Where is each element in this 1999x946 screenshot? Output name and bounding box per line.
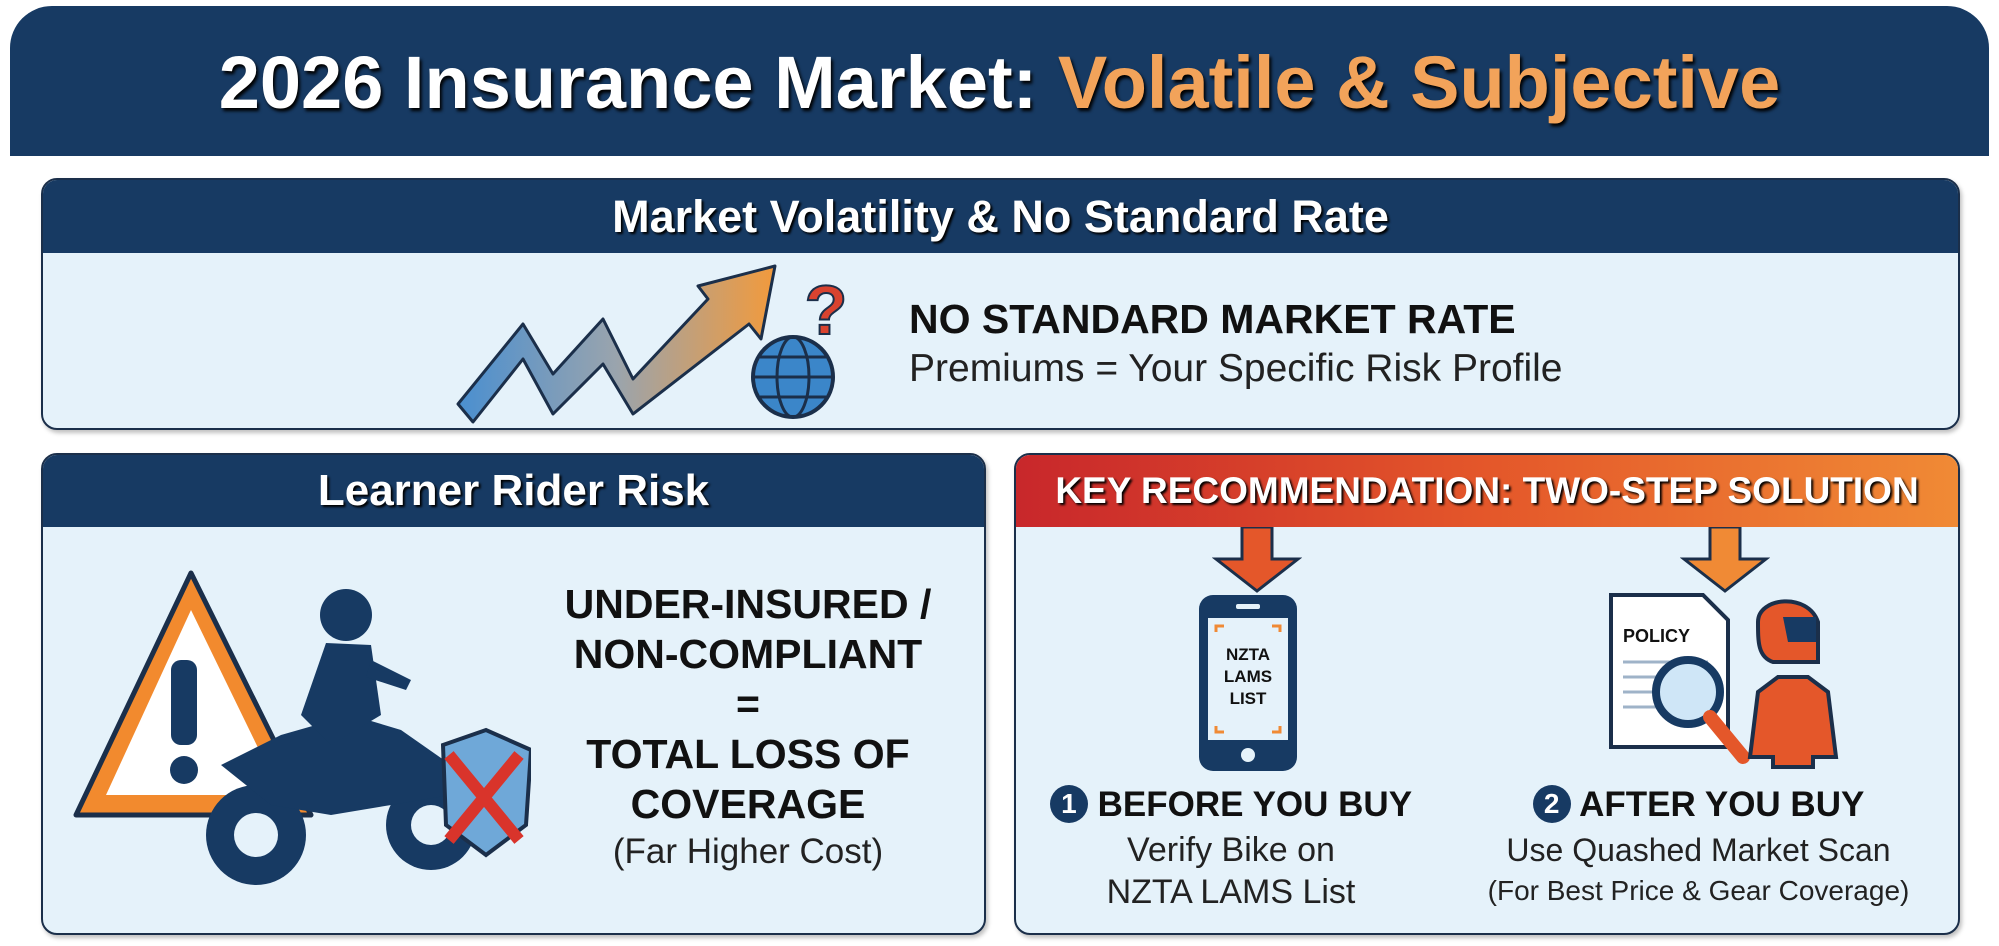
icon: warning triangle with motorbike and shield	[74, 570, 531, 885]
text: under-insured consequence: COVERAGE	[631, 781, 865, 827]
step 1 text: Verify Bike on	[1127, 831, 1335, 869]
title banner	[10, 6, 1989, 156]
panel heading: Market Volatility & No Standard Rate	[612, 191, 1389, 242]
text: no standard market rate	[909, 296, 1562, 390]
step 2 text: 2	[1544, 788, 1559, 819]
step 2 text: (For Best Price & Gear Coverage)	[1488, 875, 1909, 906]
step 1 text: BEFORE YOU BUY	[1098, 785, 1412, 824]
icon: policy, magnifier, helmet and jacket	[1609, 593, 1838, 769]
panel: key recommendation	[1014, 453, 1960, 935]
icon: phone with LAMS list: NZTA	[1226, 645, 1270, 664]
text: under-insured consequence	[565, 581, 931, 871]
step 2 text: Use Quashed Market Scan	[1506, 832, 1891, 868]
step 1 text	[1050, 785, 1412, 911]
icon: phone with LAMS list	[1199, 595, 1297, 771]
icon: globe with question mark: ?	[805, 272, 847, 349]
panel heading: Learner Rider Risk	[318, 466, 709, 515]
text: no standard market rate: NO STANDARD MARKET RATE	[909, 296, 1516, 342]
text: under-insured consequence: (Far Higher Cost)	[613, 832, 883, 871]
panel heading	[1016, 455, 1958, 527]
panel: learner rider risk	[41, 453, 986, 935]
panel: market volatility	[41, 178, 1960, 430]
text: no standard market rate: Premiums = Your Specific Risk Profile	[909, 347, 1562, 390]
text: under-insured consequence: UNDER-INSURED /	[565, 581, 931, 627]
arrow: step 1	[1212, 527, 1302, 593]
panel heading	[43, 455, 984, 527]
icon: policy, magnifier, helmet and jacket: POLICY	[1623, 626, 1690, 646]
step 1 text: 1	[1061, 788, 1077, 819]
icon: zigzag arrow chart	[456, 264, 776, 424]
arrow: step 2	[1680, 527, 1770, 593]
step 2 text	[1488, 785, 1909, 906]
title: 2026 Insurance Market: Volatile & Subjective	[219, 41, 1780, 124]
icon: globe with question mark	[751, 272, 847, 419]
text: under-insured consequence: NON-COMPLIANT	[574, 631, 922, 677]
text: under-insured consequence: TOTAL LOSS OF	[586, 731, 910, 777]
panel heading	[43, 180, 1958, 253]
icon: phone with LAMS list: LAMS	[1224, 667, 1272, 686]
icon: phone with LAMS list: LIST	[1230, 689, 1267, 708]
step 1 text: NZTA LAMS List	[1107, 873, 1355, 911]
panel heading: KEY RECOMMENDATION: TWO-STEP SOLUTION	[1055, 470, 1919, 511]
text: under-insured consequence: =	[736, 681, 760, 727]
step 2 text: AFTER YOU BUY	[1579, 785, 1864, 824]
